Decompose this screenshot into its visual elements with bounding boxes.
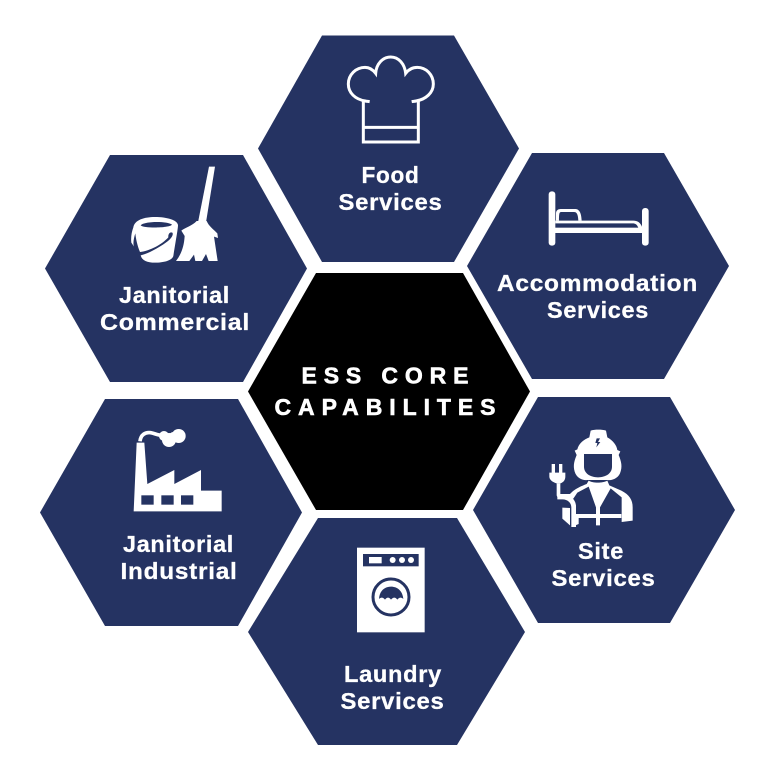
icon: chef hat: [348, 57, 433, 142]
icon: washing machine: [357, 548, 425, 632]
panel: Accommodation Services: [467, 153, 729, 379]
label: Janitorial Industrial: Janitorial: [123, 531, 234, 557]
center title: [274, 362, 496, 420]
label: Janitorial Commercial: Janitorial: [119, 282, 230, 308]
panel: Laundry Services: [248, 518, 525, 745]
center title: CAPABILITES: [274, 394, 496, 420]
label: Food Services: Services: [338, 189, 442, 215]
center title: ESS CORE: [302, 362, 468, 388]
label: Accommodation Services: Services: [547, 297, 649, 323]
panel: Janitorial Commercial: [45, 155, 307, 382]
panel: Food Services: [258, 36, 519, 262]
label: Accommodation Services: [497, 270, 698, 323]
label: Accommodation Services: Accommodation: [497, 270, 698, 296]
icon: worker with plug: [549, 430, 633, 527]
label: Janitorial Commercial: Commercial: [100, 309, 250, 335]
label: Laundry Services: Services: [340, 688, 444, 714]
label: Food Services: Food: [362, 162, 420, 188]
label: Janitorial Industrial: Industrial: [120, 558, 238, 584]
label: Laundry Services: [340, 661, 444, 714]
label: Laundry Services: Laundry: [344, 661, 442, 687]
label: Janitorial Industrial: [120, 531, 238, 584]
label: Site Services: Site: [578, 538, 624, 564]
label: Janitorial Commercial: [100, 282, 250, 335]
panel: center ESS Core Capabilites: [248, 273, 530, 510]
panel: Janitorial Industrial: [40, 399, 302, 626]
label: Site Services: [552, 538, 656, 591]
icon: bed: [549, 191, 649, 246]
panel: Site Services: [473, 397, 735, 623]
label: Site Services: Services: [552, 565, 656, 591]
icon: factory: [134, 429, 222, 511]
label: Food Services: [338, 162, 442, 215]
icon: bucket and mop: [131, 167, 218, 263]
